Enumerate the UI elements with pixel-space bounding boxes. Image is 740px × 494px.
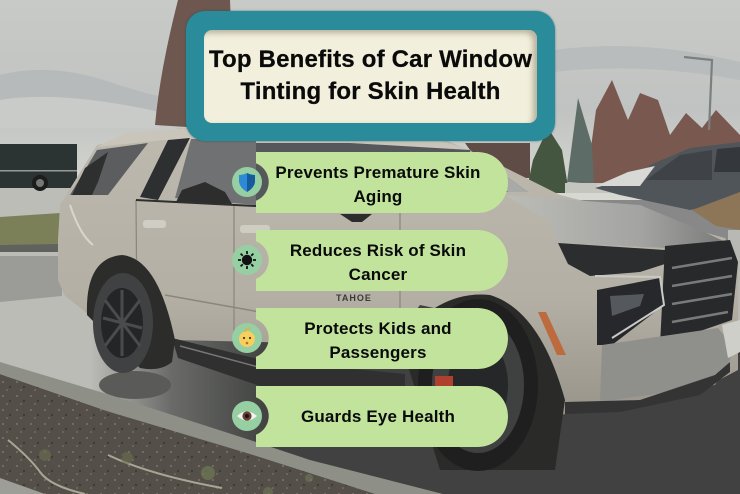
door seams and handles (136, 200, 400, 340)
curb (0, 362, 443, 494)
icon: shield (232, 167, 262, 197)
amber marker (538, 312, 566, 355)
icon: eye (232, 401, 262, 431)
icon: baby face (232, 323, 262, 353)
icon: sun (232, 245, 262, 275)
title banner (186, 11, 555, 141)
SUV body (58, 128, 738, 415)
title: Top Benefits of Car Window (209, 46, 532, 73)
far road and grass (0, 186, 80, 218)
roof (97, 128, 470, 150)
trees (155, 0, 235, 130)
benefit: protects kids and passengers (232, 308, 508, 369)
benefit: guards eye health (232, 386, 508, 447)
benefit: prevents premature skin aging: Aging (353, 186, 402, 206)
front grille and headlights (558, 243, 665, 276)
benefit: protects kids and passengers: Protects Kids and (304, 318, 452, 338)
lamp post (684, 57, 712, 130)
benefit: protects kids and passengers: Passengers (329, 342, 427, 362)
bumper (600, 328, 732, 402)
benefit: guards eye health: Guards Eye Health (301, 406, 455, 426)
benefit: reduces risk of skin cancer: Reduces Risk of Skin (290, 240, 466, 260)
benefit: reduces risk of skin cancer: Cancer (349, 264, 407, 284)
door window (175, 139, 256, 205)
rear door pillar window (140, 138, 190, 200)
benefit: reduces risk of skin cancer (232, 230, 508, 291)
truck (0, 144, 77, 188)
title panel (204, 30, 537, 123)
dark car far right (595, 142, 740, 210)
front door window and windshield (256, 143, 528, 205)
title: Tinting for Skin Health (240, 78, 501, 105)
benefit: prevents premature skin aging (232, 152, 508, 213)
front wheel (400, 295, 565, 470)
background photo: silver SUV in parking lot: TAHOE (336, 293, 372, 303)
hood (505, 195, 732, 248)
rear quarter window (70, 143, 148, 195)
rear wheel (87, 255, 175, 369)
title (209, 46, 532, 105)
benefit: prevents premature skin aging: Prevents Premature Skin (275, 162, 481, 182)
planting strip (0, 374, 375, 494)
asphalt (0, 252, 740, 494)
side skirt (172, 338, 405, 392)
